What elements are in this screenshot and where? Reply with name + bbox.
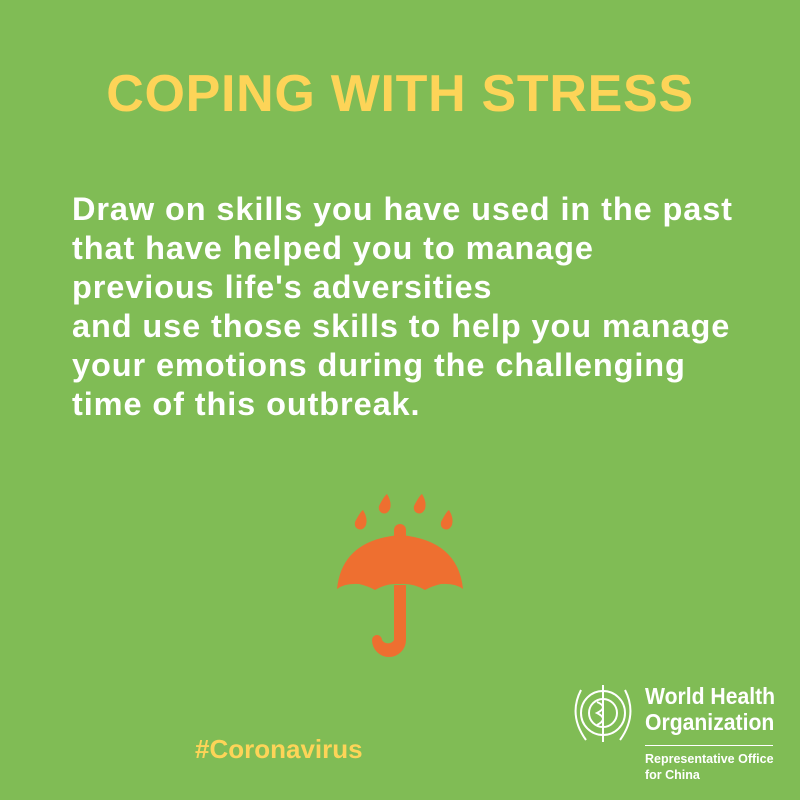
body text: [72, 191, 733, 422]
icon: WHO emblem: [574, 685, 632, 742]
body text: and use those skills to help you manage: [72, 308, 730, 344]
body text: time of this outbreak.: [72, 386, 420, 422]
body text: that have helped you to manage: [72, 230, 594, 266]
logo text: World Health: [645, 683, 775, 709]
title: COPING WITH STRESS: [106, 65, 694, 123]
body text: previous life's adversities: [72, 269, 492, 305]
body text: your emotions during the challenging: [72, 347, 686, 383]
logo text: [645, 683, 775, 735]
hashtag: #Coronavirus: [195, 734, 363, 764]
icon: umbrella with rain drops: [337, 494, 463, 657]
body text: Draw on skills you have used in the past: [72, 191, 733, 227]
WHO logo: [574, 683, 775, 782]
WHO logo: Representative Office: [645, 752, 774, 766]
WHO logo: for China: [645, 768, 700, 782]
logo text: Organization: [645, 709, 774, 735]
